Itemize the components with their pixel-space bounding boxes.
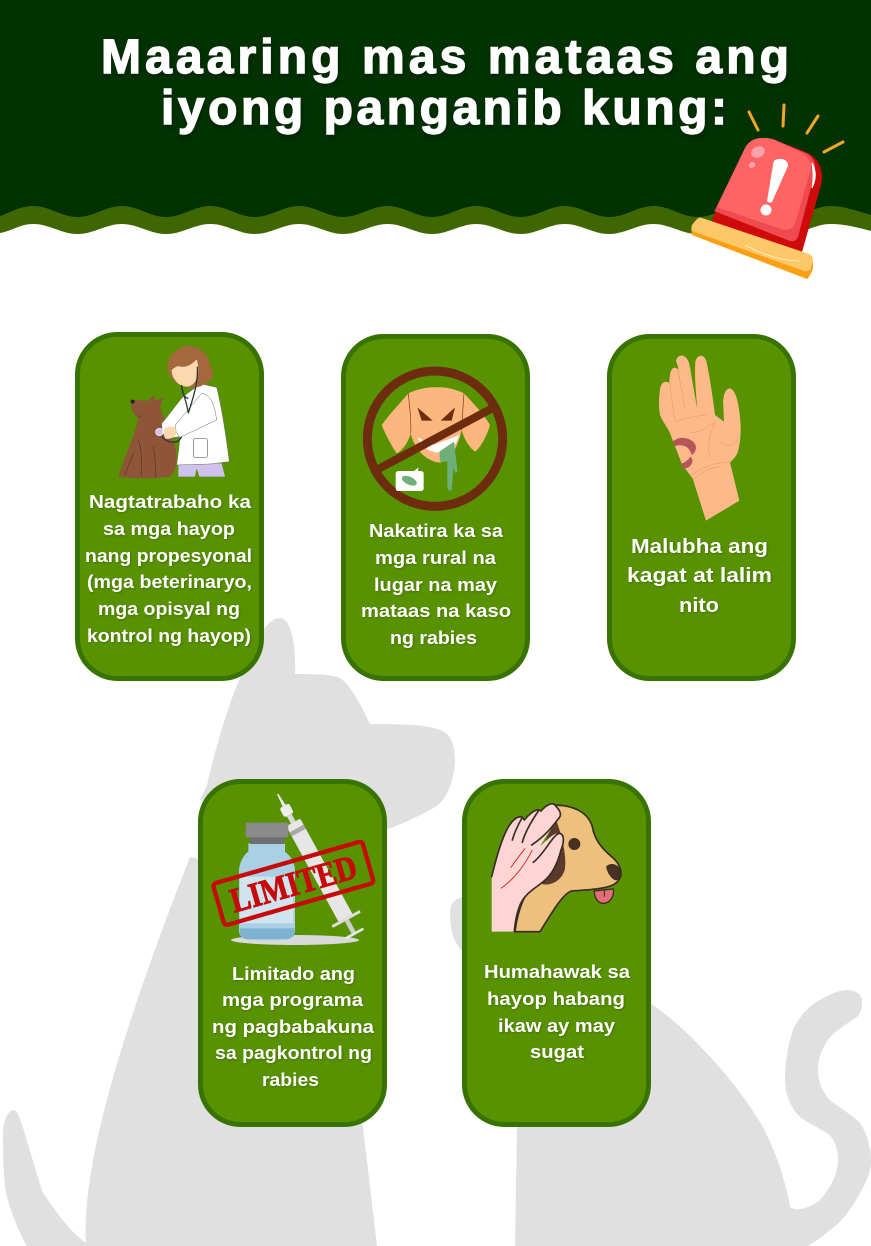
card text (484, 962, 631, 1062)
card text: mataas na kaso (361, 601, 511, 621)
card text (361, 521, 511, 648)
card text: hayop habang (487, 989, 625, 1009)
icon: red alarm siren (691, 105, 843, 279)
card text: kontrol ng hayop) (87, 626, 251, 646)
card text: ng rabies (390, 628, 477, 648)
card text: ng pagbabakuna (212, 1017, 375, 1037)
card text: lugar na may (374, 575, 497, 595)
stamp text: LIMITED (226, 848, 361, 920)
card text: mga rural na (375, 548, 497, 568)
card (344, 336, 528, 678)
card text: sa pagkontrol ng (215, 1043, 372, 1063)
background dog silhouette: left (3, 618, 455, 1246)
title line 2: iyong panganib kung: (161, 82, 727, 135)
card text: nito (679, 595, 719, 617)
siren base (691, 222, 813, 279)
panel: veterinary worker (78, 334, 262, 678)
panel: handling animal while wounded (464, 782, 648, 1124)
title line 1: Maaaring mas mataas ang (101, 31, 789, 84)
card text: kagat at lalim (627, 565, 772, 587)
card text (212, 964, 375, 1090)
card text: Nakatira ka sa (369, 521, 504, 541)
card (200, 782, 384, 1124)
panel: rural areas (344, 336, 528, 678)
icon: bitten hand (659, 355, 741, 521)
header band (0, 0, 871, 234)
card text (85, 492, 252, 646)
icon: wounded hand petting dog (492, 804, 621, 932)
card text: (mga beterinaryo, (87, 572, 252, 592)
siren rays (749, 105, 843, 152)
panel: limited vaccination (200, 782, 384, 1124)
card text: nang propesyonal (85, 546, 252, 566)
card text: ikaw ay may (498, 1016, 615, 1036)
icon: rabid dog in prohibition sign (367, 371, 503, 506)
dark green wave band (0, 0, 871, 217)
card text: mga programa (222, 990, 364, 1010)
card text: Malubha ang (631, 536, 768, 558)
card text: sa mga hayop (103, 519, 235, 539)
card text: Nagtatrabaho ka (89, 492, 252, 512)
icon: vaccine vial and syringe with limited stamp (213, 786, 374, 945)
card text (627, 536, 772, 617)
card (610, 336, 794, 678)
card text: Humahawak sa (484, 962, 631, 982)
background dog silhouette: right (450, 892, 871, 1246)
siren dome (708, 138, 822, 262)
card text: mga opisyal ng (98, 599, 240, 619)
card (464, 782, 648, 1124)
exclamation mark (767, 159, 788, 203)
olive wave (0, 180, 871, 234)
card text: sugat (530, 1042, 584, 1062)
card text: Limitado ang (232, 964, 355, 984)
card text: rabies (262, 1070, 319, 1090)
icon: vet with dog (118, 346, 229, 478)
card (78, 334, 262, 678)
panel: severe bite (610, 336, 794, 678)
title (101, 31, 789, 135)
